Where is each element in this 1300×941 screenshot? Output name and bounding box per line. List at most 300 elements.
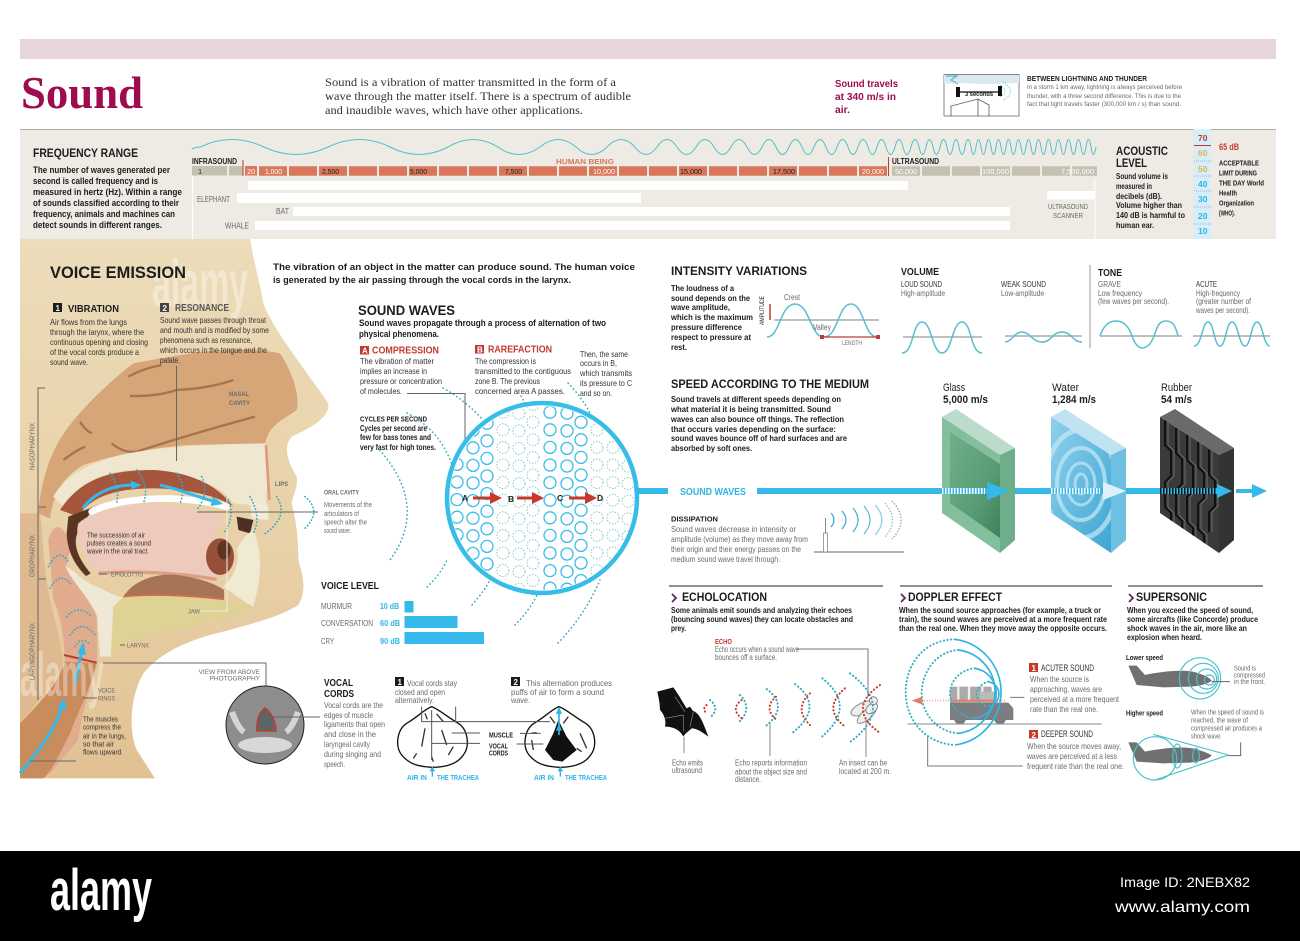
acoustic level text: LEVEL xyxy=(1116,156,1147,170)
acceptable limit: THE DAY World xyxy=(1219,178,1264,188)
intensity description: The loudness of a xyxy=(671,283,734,293)
zone letters xyxy=(462,493,603,504)
vocal cord line xyxy=(64,655,97,663)
text: oral cavity: ORAL CAVITY xyxy=(324,490,360,496)
panel: tone: ACUTE xyxy=(1196,280,1217,289)
echo arcs red xyxy=(704,685,880,732)
dissipation: DISSIPATION xyxy=(671,514,718,524)
frequency scale: 7,500 xyxy=(505,167,522,176)
frequency scale: 20 xyxy=(247,167,255,176)
rubber slab xyxy=(1160,382,1234,565)
step 2: resonance: Sound wave passes through throat xyxy=(160,315,267,325)
molecule rings xyxy=(450,406,634,590)
acute wave xyxy=(1193,322,1270,346)
head anatomy labels and leader lines: pulses creates a sound xyxy=(87,538,151,548)
title: Sound xyxy=(21,67,143,118)
step 2: resonance: 2 xyxy=(162,304,168,313)
step 1: vibration: sound wave. xyxy=(50,357,88,367)
text: vocal cords: ligaments that open xyxy=(324,719,385,729)
supersonic labels: compressed xyxy=(1234,670,1265,680)
frequency scale: HUMAN BEING xyxy=(556,159,615,166)
echolocation description: (bouncing sound waves) they can locate obstacles and xyxy=(671,614,853,624)
heading: sound waves xyxy=(358,302,606,339)
zone letters: C xyxy=(557,493,563,503)
panel: doppler effect xyxy=(899,586,1124,771)
footer image id: Image ID: 2NEBX82 xyxy=(1120,874,1250,890)
frequency heading: FREQUENCY RANGE xyxy=(33,146,138,160)
frequency scale: 2,500 xyxy=(322,167,339,176)
intro statement: is generated by the air passing through the vocal cords in the larynx. xyxy=(273,275,571,286)
vocal cords step 2 xyxy=(510,677,612,705)
lips xyxy=(237,517,253,533)
floor of mouth xyxy=(111,595,253,657)
upper teeth xyxy=(92,499,227,512)
higher speed waves xyxy=(1133,734,1228,780)
arrow: exit xyxy=(1236,484,1267,498)
acoustic level text xyxy=(1116,144,1185,230)
illustration: head cross section xyxy=(20,239,328,778)
intensity description: respect to pressure at xyxy=(671,332,751,342)
vocal cords photo xyxy=(199,669,320,764)
text: vocal cords: and close in the xyxy=(324,729,376,739)
step 2: resonance: palate. xyxy=(160,355,180,365)
dissipation: Sound waves decrease in intensity or xyxy=(671,525,796,534)
wave anatomy chart xyxy=(760,293,880,347)
frequency description: measured in hertz (Hz). Within a range xyxy=(33,187,182,197)
hearing range bars xyxy=(192,176,1095,239)
intensity description: pressure difference xyxy=(671,322,742,332)
loud wave xyxy=(902,322,982,353)
panel: echolocation: ECHOLOCATION xyxy=(682,590,767,604)
head anatomy labels and leader lines: so that air xyxy=(83,740,114,748)
frequency scale: 5,000 xyxy=(410,167,427,176)
step 2: resonance xyxy=(159,303,269,365)
decibel meter: 50 xyxy=(1198,164,1208,174)
head anatomy labels and leader lines xyxy=(30,366,318,761)
text: vocal cords: VOCAL xyxy=(324,678,353,689)
water slab xyxy=(1045,382,1126,553)
step 2: resonance: phenomena such as resonance, xyxy=(160,335,252,345)
text: cycles per second: Cycles per second are xyxy=(360,424,427,433)
truck xyxy=(950,687,1013,724)
acceptable limit xyxy=(1219,142,1264,218)
supersonic description: some aircrafts (like Concorde) produce xyxy=(1127,614,1258,624)
dissipation: amplitude (volume) as they move away from xyxy=(671,535,808,544)
panel: tone: (greater number of xyxy=(1196,297,1252,306)
text: cycles per second: CYCLES PER SECOND xyxy=(360,414,427,424)
echolocation description: prey. xyxy=(671,623,686,633)
frequency scale: INFRASOUND xyxy=(192,157,237,166)
intensity description: wave amplitude, xyxy=(670,302,730,312)
deeper sound: frequent rate than the real one. xyxy=(1027,761,1124,771)
decibel meter xyxy=(1194,129,1211,239)
dissipation: medium sound wave travel through. xyxy=(671,555,780,564)
step 1: vibration: continuous opening and closing xyxy=(50,337,148,347)
zone letters: A xyxy=(462,493,468,503)
doppler diagram xyxy=(906,639,1102,766)
block A: compression: implies an increase in xyxy=(360,366,427,376)
voice level bar chart: MURMUR xyxy=(321,602,352,611)
dark throat channel xyxy=(67,505,98,576)
step 1: vibration: 1 xyxy=(56,304,60,313)
frequency scale: 7,500,000 xyxy=(1061,167,1094,176)
head anatomy labels and leader lines: LARYNX xyxy=(127,642,150,650)
radiating dotted arcs xyxy=(377,383,600,643)
wave anatomy chart: LENGTH xyxy=(842,341,862,347)
hearing range bars: ULTRASOUND xyxy=(1048,202,1088,211)
diagram: sound wave molecules circle xyxy=(444,400,640,596)
vocal cords step 1: Vocal cords stay xyxy=(407,678,458,688)
water slab: 1,284 m/s xyxy=(1052,394,1096,406)
panel: volume: WEAK SOUND xyxy=(1001,280,1046,289)
icon: bat xyxy=(657,687,708,737)
supersonic description: shock waves in the air, more like an xyxy=(1127,623,1247,633)
panel: intensity variations: INTENSITY VARIATIONS xyxy=(671,264,807,278)
text: vocal cords: CORDS xyxy=(324,689,354,700)
deeper sound: 2 xyxy=(1032,731,1036,740)
head anatomy labels and leader lines: NASAL xyxy=(229,391,249,398)
head anatomy labels and leader lines: LARYNGOPHARYNX xyxy=(30,623,36,680)
hearing range bars: BAT xyxy=(276,207,289,216)
echolocation description xyxy=(671,605,853,633)
text: then the same xyxy=(579,349,632,398)
acoustic level text: measured in xyxy=(1116,181,1152,191)
doppler description: train), the sound waves are perceived at a more frequent rate xyxy=(899,614,1107,624)
rubber slab: Rubber xyxy=(1161,382,1192,394)
text: then the same: occurs in B, xyxy=(580,358,617,368)
voice level bar chart: CONVERSATION xyxy=(321,619,373,628)
hearing range bars: ELEPHANT xyxy=(197,195,230,204)
echo labels: distance. xyxy=(735,775,761,784)
glass slab: 5,000 m/s xyxy=(943,394,988,406)
oral roof xyxy=(60,470,233,517)
intensity description xyxy=(670,283,753,352)
watermark: alamy xyxy=(152,246,248,320)
watermark xyxy=(20,246,248,710)
frequency scale: 17,500 xyxy=(773,167,795,176)
decibel meter: 70 xyxy=(1198,133,1208,143)
step 1: vibration xyxy=(50,303,148,367)
icon: antenna xyxy=(814,501,904,552)
dotted wave fronts xyxy=(906,639,988,745)
larynx xyxy=(65,565,123,657)
deeper sound xyxy=(1026,729,1124,771)
acceptable limit: Health xyxy=(1219,188,1237,198)
panel: speed according to medium xyxy=(637,377,1267,565)
tongue xyxy=(77,505,223,579)
heading: sound waves: physical phenomena. xyxy=(359,329,439,339)
intensity description: which is the maximum xyxy=(670,312,753,322)
higher speed plane xyxy=(1128,742,1212,763)
panel: frequency range xyxy=(20,129,1276,239)
panel: supersonic: SUPERSONIC xyxy=(1136,590,1207,604)
acceptable limit: ACCEPTABLE xyxy=(1219,158,1259,168)
larynx labels: THE TRACHEA xyxy=(565,773,607,782)
nasal cavity xyxy=(38,349,298,518)
doppler description: than the real one. When they move away the opposite occurs. xyxy=(899,623,1107,633)
callout: speed of sound in air: at 340 m/s in xyxy=(835,91,896,103)
step 1: vibration: of the vocal cords produce a xyxy=(50,347,139,357)
text: between lightning and thunder: fact that light travels faster (300,000 km / s) than sound. xyxy=(1027,101,1181,108)
trachea arrows xyxy=(432,768,560,777)
frequency description: The number of waves generated per xyxy=(33,165,170,175)
leader lines xyxy=(1212,682,1241,756)
text: oral cavity: Movements of the xyxy=(324,502,372,509)
hearing range bars: WHALE xyxy=(225,222,249,230)
doppler description: When the sound source approaches (for example, a truck or xyxy=(899,605,1102,615)
echolocation description: Some animals emit sounds and analyzing their echoes xyxy=(671,605,852,615)
block B: rarefaction xyxy=(475,344,571,396)
acoustic level text: human ear. xyxy=(1116,220,1154,230)
larynx labels: MUSCLE xyxy=(489,732,513,740)
callout: speed of sound in air: Sound travels xyxy=(835,78,898,90)
voice level bar chart: CRY xyxy=(321,637,335,646)
head anatomy labels and leader lines: RINGS xyxy=(98,696,116,702)
zone letters: B xyxy=(508,494,514,504)
lower speed waves xyxy=(1179,658,1221,699)
nasal streaks xyxy=(63,365,255,460)
divider xyxy=(1089,265,1091,348)
panel: tone: TONE xyxy=(1098,268,1122,279)
larynx labels: CORDS xyxy=(489,750,508,758)
glass slab xyxy=(942,382,1015,553)
head anatomy labels and leader lines: CAVITY xyxy=(229,400,251,407)
block B: rarefaction: The compression is xyxy=(475,356,536,366)
block A: compression: A xyxy=(362,346,368,356)
acuter sound: rate than the real one. xyxy=(1030,704,1098,714)
intro statement: The vibration of an object in the matter can produce sound. The human voice xyxy=(273,262,635,273)
larynx open xyxy=(525,707,595,767)
text: vocal cords: speech. xyxy=(324,759,345,769)
frequency scale: 1 xyxy=(198,167,202,176)
sound wave beam: SOUND WAVES xyxy=(680,487,746,498)
voice level bar chart: 90 dB xyxy=(380,637,400,646)
icon: fly xyxy=(849,697,880,726)
decibel meter: 30 xyxy=(1198,194,1208,204)
text: between lightning and thunder: thunder, with a three second difference. This is due to the xyxy=(1027,93,1181,100)
text: vocal cords: laryngeal cavity xyxy=(324,739,371,749)
acuter sound: When the source is xyxy=(1030,674,1089,684)
echo callout: bounces off a surface. xyxy=(715,653,777,662)
watermark: alamy xyxy=(20,641,104,710)
top band xyxy=(20,39,1276,59)
speed description: Sound travels at different speeds depending on xyxy=(671,394,841,404)
speed description: absorbed by soft ones. xyxy=(671,443,752,453)
echo callout xyxy=(715,637,868,697)
echo labels: An insect can be xyxy=(839,758,887,768)
panel: echolocation xyxy=(657,586,891,784)
jaw muscle xyxy=(123,575,224,598)
larynx labels: AIR IN xyxy=(534,773,554,782)
wave anatomy chart: Valley xyxy=(813,323,831,332)
chirp wave xyxy=(192,140,1096,154)
vocal cords step 1: alternatively. xyxy=(395,695,434,705)
head anatomy labels and leader lines: The succession of air xyxy=(87,530,145,540)
zone letters: D xyxy=(597,493,603,503)
head anatomy labels and leader lines: compress the xyxy=(83,722,121,732)
footer website: www.alamy.com xyxy=(1114,899,1250,916)
frequency scale: 1,000 xyxy=(265,167,282,176)
acceptable limit: Organization xyxy=(1219,198,1254,208)
text: oral cavity: speech alter the xyxy=(324,520,367,526)
text: oral cavity: articulators of xyxy=(324,511,359,518)
frequency description xyxy=(33,165,182,230)
vocal cords step 2: wave. xyxy=(510,695,530,705)
vocal cords photo: PHOTOGRAPHY xyxy=(210,676,261,682)
acuter sound: approaching, waves are xyxy=(1030,684,1102,694)
panel: volume: VOLUME xyxy=(901,267,939,278)
voice level bar chart: VOICE LEVEL xyxy=(321,581,379,592)
vocal cords step 1: 1 xyxy=(398,678,402,687)
supersonic labels: Lower speed xyxy=(1126,653,1163,662)
panel: volume: High-amplitude xyxy=(901,289,945,298)
text: then the same: Then, the same xyxy=(580,349,628,359)
back of neck xyxy=(20,513,63,723)
frequency description: second is called frequency and is xyxy=(33,176,158,186)
heading: voice emission: VOICE EMISSION xyxy=(50,263,186,282)
intro text xyxy=(325,75,631,117)
step 2: resonance: which occurs in the tongue and the xyxy=(159,345,267,355)
zone arrows xyxy=(473,492,597,504)
frequency scale: 10,000 xyxy=(593,167,615,176)
frequency description: of sounds classified according to their xyxy=(33,198,179,208)
supersonic labels: When the speed of sound is xyxy=(1191,708,1264,716)
step 2: resonance: RESONANCE xyxy=(175,303,229,314)
glass slab: Glass xyxy=(943,382,965,394)
panel: tone: (few waves per second). xyxy=(1098,297,1169,306)
text: then the same: and so on. xyxy=(580,388,612,398)
echo callout: Echo occurs when a sound wave xyxy=(715,645,799,654)
rubber slab: 54 m/s xyxy=(1161,394,1192,406)
text: oral cavity xyxy=(324,490,372,535)
supersonic labels: Sound is xyxy=(1234,664,1256,672)
ground line xyxy=(908,722,1102,725)
echo labels: about the object size and xyxy=(735,768,807,776)
inner mouth xyxy=(206,538,234,575)
text: between lightning and thunder: BETWEEN LIGHTNING AND THUNDER xyxy=(1027,74,1148,83)
panel: supersonic xyxy=(1126,586,1265,780)
acceptable limit: LIMIT DURING xyxy=(1219,168,1257,178)
dissipation xyxy=(671,501,904,564)
step 1: vibration: Air flows from the lungs xyxy=(50,317,127,327)
echo labels xyxy=(672,720,891,784)
intro statement xyxy=(273,262,635,286)
larynx labels: VOCAL xyxy=(489,744,509,750)
speed description: what material it is being transmitted. Sound xyxy=(670,404,831,414)
step 1: vibration: VIBRATION xyxy=(68,304,119,315)
deeper sound: When the source moves away, xyxy=(1027,741,1121,751)
panel: speed according to medium: SPEED ACCORDING TO THE MEDIUM xyxy=(671,377,869,391)
footer logo: alamy xyxy=(50,858,152,923)
voice level bar chart: 60 dB xyxy=(380,619,400,628)
head anatomy labels and leader lines: air in the lungs, xyxy=(83,732,126,740)
intro text: and inaudible waves, which have other applications. xyxy=(325,103,583,117)
intro text: Sound is a vibration of matter transmitted in the form of a xyxy=(325,75,617,89)
diagram: larynx closed and open xyxy=(398,707,595,777)
speed description: sound waves bounce off of hard surfaces and are xyxy=(671,433,847,443)
supersonic labels: reached, the wave of xyxy=(1191,716,1249,724)
deeper sound: waves are perceived at a less xyxy=(1026,751,1117,761)
leader lines xyxy=(422,707,550,760)
text: cycles per second: very fast for high tones. xyxy=(360,443,436,452)
larynx labels: THE TRACHEA xyxy=(437,773,479,782)
supersonic description: When you exceed the speed of sound, xyxy=(1127,605,1253,615)
echolocation diagram xyxy=(657,673,880,743)
text: vocal cords: during singing and xyxy=(324,749,381,759)
supersonic diagrams xyxy=(1128,658,1241,780)
larynx closed xyxy=(398,707,467,767)
grave wave xyxy=(1100,321,1182,348)
head anatomy labels and leader lines: LIPS xyxy=(275,481,289,488)
block B: rarefaction: transmitted to the contiguous xyxy=(475,366,571,376)
head anatomy labels and leader lines: NASOPHARYNX xyxy=(30,423,36,470)
frequency scale: 15,000 xyxy=(680,167,702,176)
acuter sound: 1 xyxy=(1032,664,1036,673)
frequency scale: 100,000 xyxy=(982,167,1009,176)
head anatomy labels and leader lines: The muscles xyxy=(83,714,118,724)
text: oral cavity: sound wave. xyxy=(324,528,351,535)
acuter sound: perceived at a more frequent xyxy=(1030,694,1120,704)
deeper sound: DEEPER SOUND xyxy=(1041,729,1093,739)
echo callout: ECHO xyxy=(715,637,732,646)
text: cycles per second xyxy=(360,414,436,452)
acceptable limit: (WHO). xyxy=(1219,208,1235,218)
echo labels: Echo emits xyxy=(672,758,703,768)
block A: compression: pressure or concentration xyxy=(360,376,442,386)
dissipation: their origin and their energy passes on the xyxy=(671,545,801,554)
panel: doppler effect: DOPPLER EFFECT xyxy=(908,590,1003,604)
pharynx xyxy=(20,527,97,773)
vocal cords photo: VIEW FROM ABOVE xyxy=(199,669,261,676)
callout: speed of sound in air: air. xyxy=(835,104,850,116)
head anatomy labels and leader lines: EPIGLOTTIS xyxy=(111,572,144,578)
acoustic level text: Volume higher than xyxy=(1116,200,1182,210)
echo labels: located at 200 m. xyxy=(839,767,891,776)
frequency scale xyxy=(192,157,1097,176)
frequency description: frequency, animals and machines can xyxy=(33,209,175,219)
wave anatomy chart: AMPLITUDE xyxy=(760,296,766,325)
icon: lightning and thunder xyxy=(944,74,1019,116)
supersonic labels: shock wave. xyxy=(1191,732,1222,740)
frequency description: detect sounds in different ranges. xyxy=(33,220,162,230)
head anatomy labels and leader lines: JAW xyxy=(188,608,201,616)
block B: rarefaction: concerned area A passes. xyxy=(475,386,565,396)
head anatomy labels and leader lines: flows upward. xyxy=(83,748,123,756)
frequency scale: 50,000 xyxy=(895,167,917,176)
text: then the same: its pressure to C xyxy=(580,378,632,388)
text: vocal cords: edges of muscle xyxy=(324,710,373,720)
lower speed plane xyxy=(1128,666,1212,687)
voice level bar chart xyxy=(321,581,484,646)
vocal cords step 2: This alternation produces xyxy=(526,678,612,688)
larynx labels xyxy=(407,732,607,782)
panel: tone: GRAVE xyxy=(1098,280,1121,289)
step 2: resonance: and mouth and is modified by some xyxy=(160,325,269,335)
speed description: that occurs varies depending on the surface: xyxy=(671,424,836,434)
sound wave dotted arcs xyxy=(48,470,314,647)
icon: lightning and thunder: 3 seconds xyxy=(965,91,993,98)
echo labels: ultrasound xyxy=(672,766,702,775)
panel: volume: LOUD SOUND xyxy=(901,280,942,289)
direction arrow xyxy=(912,697,1007,705)
block B: rarefaction: zone B. The previous xyxy=(475,376,540,386)
intensity description: sound depends on the xyxy=(671,293,750,303)
block B: rarefaction: B xyxy=(477,346,483,354)
echo labels: Echo reports information xyxy=(735,758,807,768)
trachea xyxy=(20,662,97,778)
leader lines xyxy=(928,697,1024,766)
vocal cords step 2: 2 xyxy=(514,678,518,687)
